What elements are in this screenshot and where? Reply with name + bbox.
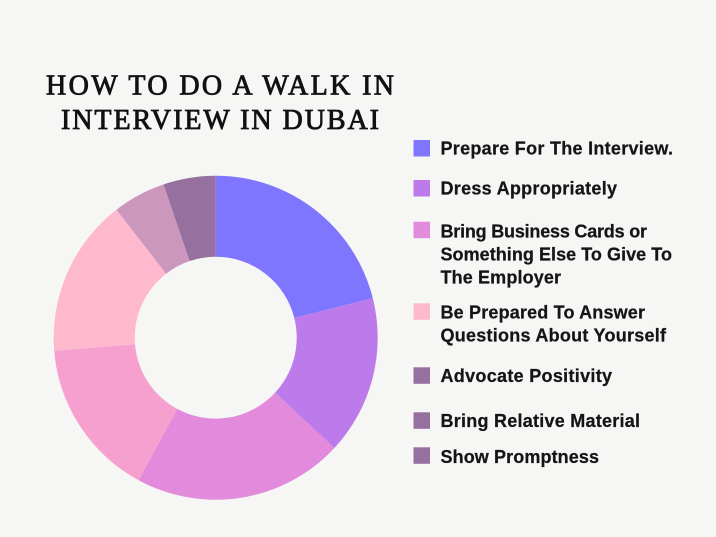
segment: bring relative material [116,184,190,274]
title [46,70,394,136]
segment: prepare for the interview [216,176,373,318]
legend item: show promptness: Show Promptness [440,447,599,467]
title: HOW TO DO A WALK IN [46,70,394,102]
legend item: bring business cards: Something Else To Give To [440,245,672,265]
legend item: bring business cards: Bring Business Cards or [440,222,647,242]
legend item: bring business cards [414,222,672,288]
segment: be prepared to answer [54,344,177,480]
donut chart [54,176,378,500]
legend item: be prepared to answer: Be Prepared To Answer [440,303,645,323]
legend item: bring business cards: The Employer [440,268,561,288]
legend item: dress appropriately: Dress Appropriately [440,179,617,199]
legend item: advocate positivity: Advocate Positivity [440,366,612,386]
segment: bring business cards [139,393,334,500]
title: INTERVIEW IN DUBAI [61,105,379,136]
legend item: prepare for the interview: Prepare For The Interview. [440,139,673,159]
segment: advocate positivity [54,210,166,351]
legend item: be prepared to answer [414,303,667,346]
legend [414,139,673,467]
legend item: be prepared to answer: Questions About Yourself [440,326,667,346]
segment: show promptness [164,176,216,261]
legend item: bring relative material: Bring Relative Material [440,411,640,431]
segment: dress appropriately [275,298,378,448]
